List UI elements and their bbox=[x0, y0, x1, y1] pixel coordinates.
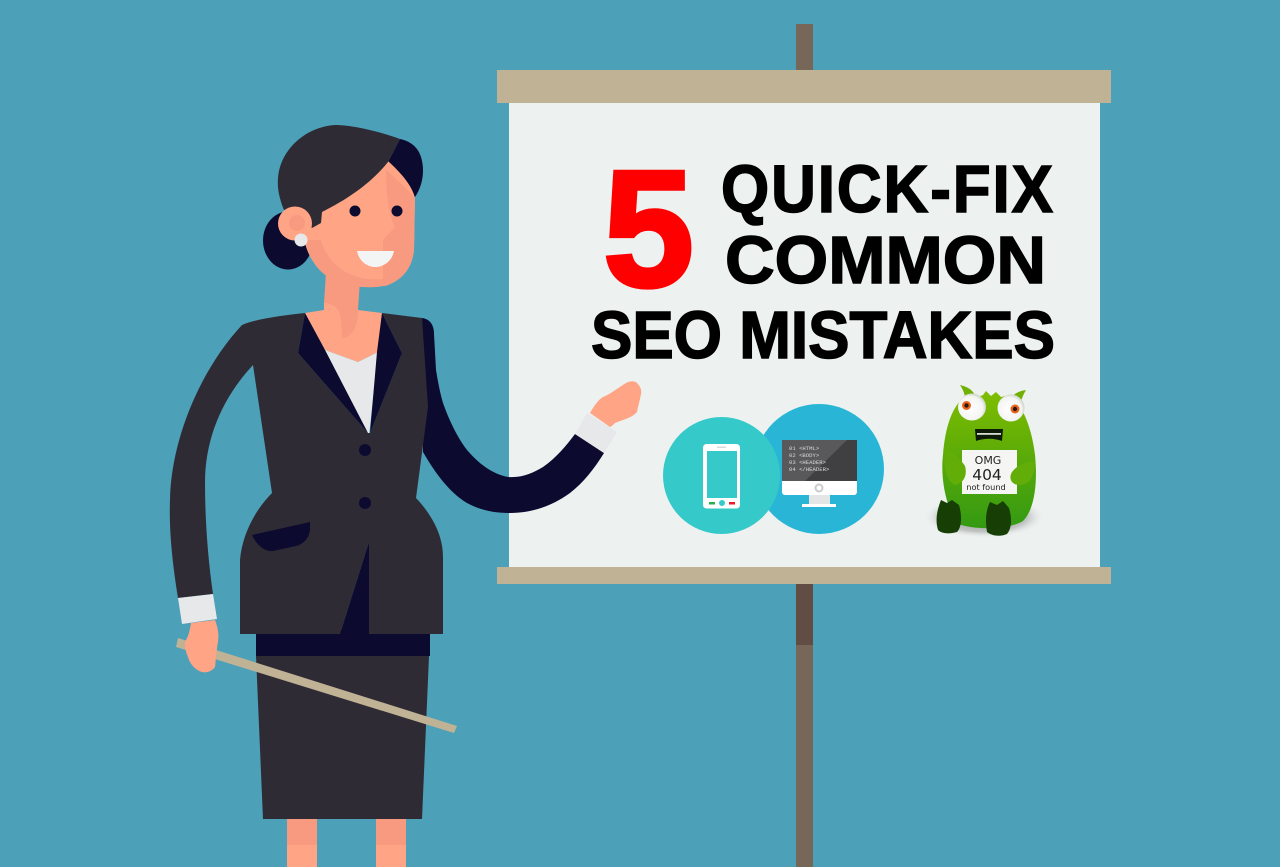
jacket pocket bbox=[252, 522, 310, 551]
face shadow bbox=[383, 170, 415, 286]
jacket lapels bbox=[298, 313, 402, 433]
title line 1: QUICK-FIX bbox=[721, 152, 1053, 227]
jacket and left sleeve bbox=[170, 313, 443, 634]
big number 5: 5 bbox=[603, 137, 694, 322]
icon: green 404 monster: OMG bbox=[975, 454, 1001, 467]
left hand bbox=[185, 620, 218, 672]
monster horns bbox=[960, 385, 1026, 406]
title bbox=[591, 137, 1055, 373]
back hair bbox=[388, 139, 423, 197]
icon: green 404 monster: not found bbox=[966, 482, 1006, 492]
earring bbox=[294, 234, 308, 246]
code lines: 04 </HEADER> bbox=[789, 466, 830, 473]
monster eyes bbox=[958, 394, 986, 420]
hair bbox=[278, 125, 400, 228]
pointing arm bbox=[422, 318, 641, 513]
monster sign bbox=[962, 450, 1017, 494]
face bbox=[305, 161, 415, 287]
blouse bbox=[325, 350, 378, 436]
ear bbox=[278, 206, 312, 240]
pointer stick bbox=[176, 638, 457, 733]
icon: green 404 monster: 404 bbox=[972, 466, 1002, 484]
left cuff bbox=[178, 594, 217, 624]
monster body bbox=[942, 391, 1036, 528]
jacket buttons bbox=[359, 444, 371, 509]
monster arms bbox=[944, 445, 966, 485]
title line 3: SEO MISTAKES bbox=[591, 298, 1055, 373]
monster feet bbox=[937, 500, 961, 533]
eyes bbox=[350, 206, 402, 216]
presenter woman bbox=[170, 125, 641, 867]
skirt bbox=[256, 630, 430, 819]
title line 2: COMMON bbox=[725, 222, 1046, 297]
icon: desktop in blue circle bbox=[754, 404, 884, 534]
jacket slit bbox=[340, 542, 369, 634]
icon: green 404 monster bbox=[923, 385, 1045, 538]
code lines bbox=[789, 445, 830, 473]
monster mouth bbox=[975, 429, 1003, 441]
code lines: 02 <BODY> bbox=[789, 452, 820, 459]
hair bun bbox=[263, 212, 313, 270]
code lines: 03 <HEADER> bbox=[789, 459, 827, 466]
projector screen stand bbox=[497, 24, 1111, 867]
head bbox=[263, 125, 423, 287]
legs bbox=[287, 815, 406, 867]
code lines: 01 <HTML> bbox=[789, 445, 820, 452]
smile bbox=[357, 251, 394, 267]
icon: phone in teal circle bbox=[663, 417, 780, 534]
neck and chest bbox=[305, 272, 382, 362]
